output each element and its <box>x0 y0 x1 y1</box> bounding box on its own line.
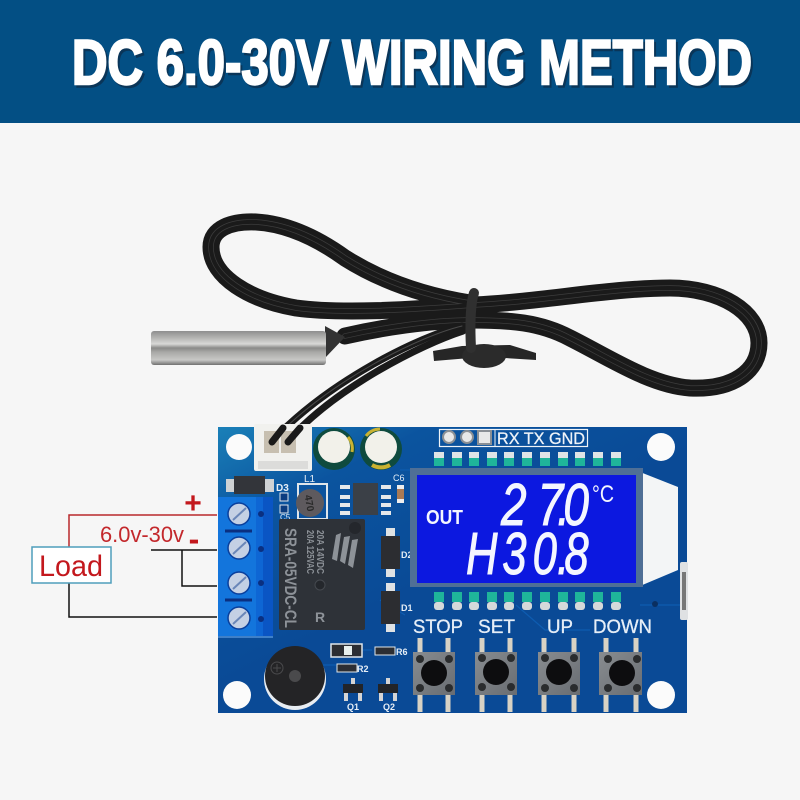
LCD pins top <box>434 452 621 466</box>
wiring diagram <box>69 515 217 617</box>
sensor cable <box>211 222 759 441</box>
LCD readings: H30.8 <box>466 521 589 587</box>
small parts F C5: C5 <box>280 513 291 522</box>
button STOP <box>413 638 455 712</box>
minus sign: - <box>189 521 199 557</box>
resistors and LED: R6 <box>396 647 408 657</box>
JST connector <box>254 424 312 471</box>
LCD display <box>410 468 643 587</box>
transistors Q1 Q2: Q1 <box>347 702 359 712</box>
LCD readings: 27.0 <box>500 473 589 538</box>
resistors and LED: R2 <box>357 664 369 674</box>
relay text: 20A 14VDC <box>314 530 325 574</box>
capacitor C6 <box>393 473 405 503</box>
screws <box>228 503 250 629</box>
IC <box>340 483 391 515</box>
relay text <box>281 528 325 628</box>
voltage label: 6.0v-30v <box>100 522 184 547</box>
relay text: 20A 125VAC <box>304 530 315 574</box>
metal temperature probe <box>151 326 345 365</box>
mounting holes <box>223 433 675 709</box>
resistors and LED <box>331 644 408 674</box>
button DOWN <box>599 638 642 712</box>
capacitor C6: C6 <box>393 473 405 483</box>
inductor L1: L1 <box>304 474 316 485</box>
transistors Q1 Q2: Q2 <box>383 702 395 712</box>
capacitors <box>313 428 402 470</box>
buzzer <box>264 646 326 710</box>
button labels: DOWN <box>593 617 652 638</box>
load return wire <box>69 583 217 617</box>
diodes D2 D1: D2 <box>401 550 413 560</box>
relay logo <box>332 533 358 568</box>
diodes D2 D1 <box>381 528 413 632</box>
traces <box>320 470 680 665</box>
small parts F C5 <box>280 493 291 522</box>
cable tie <box>433 293 536 368</box>
side connector <box>652 562 688 620</box>
relay <box>279 519 365 630</box>
inductor L1 <box>296 474 327 519</box>
diode D3 <box>226 476 289 494</box>
relay text: SRA-05VDC-CL <box>281 528 300 628</box>
inductor L1: 470 <box>302 494 315 513</box>
LCD readings <box>426 473 614 587</box>
transistors Q1 Q2 <box>343 678 398 712</box>
circuit board <box>218 427 687 713</box>
positive wire <box>69 515 217 547</box>
button labels: UP <box>547 617 573 638</box>
button SET <box>475 638 517 712</box>
diodes D2 D1: D1 <box>401 603 413 613</box>
button labels: STOP <box>413 617 463 638</box>
screw terminal block <box>218 497 273 638</box>
pin header RX TX GND: RX TX GND <box>497 429 585 448</box>
LCD readings: °C <box>592 481 614 508</box>
LCD readings: OUT <box>426 507 463 529</box>
relay: R <box>315 609 325 625</box>
button labels: SET <box>478 617 515 638</box>
button labels <box>413 617 652 638</box>
load box: Load <box>39 550 103 583</box>
negative wire <box>151 550 217 586</box>
header banner <box>0 0 800 123</box>
plus sign: + <box>184 487 202 520</box>
pin header RX TX GND <box>440 429 588 448</box>
button UP <box>538 638 580 712</box>
diode D3: D3 <box>276 483 289 494</box>
LCD pins bottom <box>434 592 621 610</box>
LCD ribbon <box>640 472 678 586</box>
